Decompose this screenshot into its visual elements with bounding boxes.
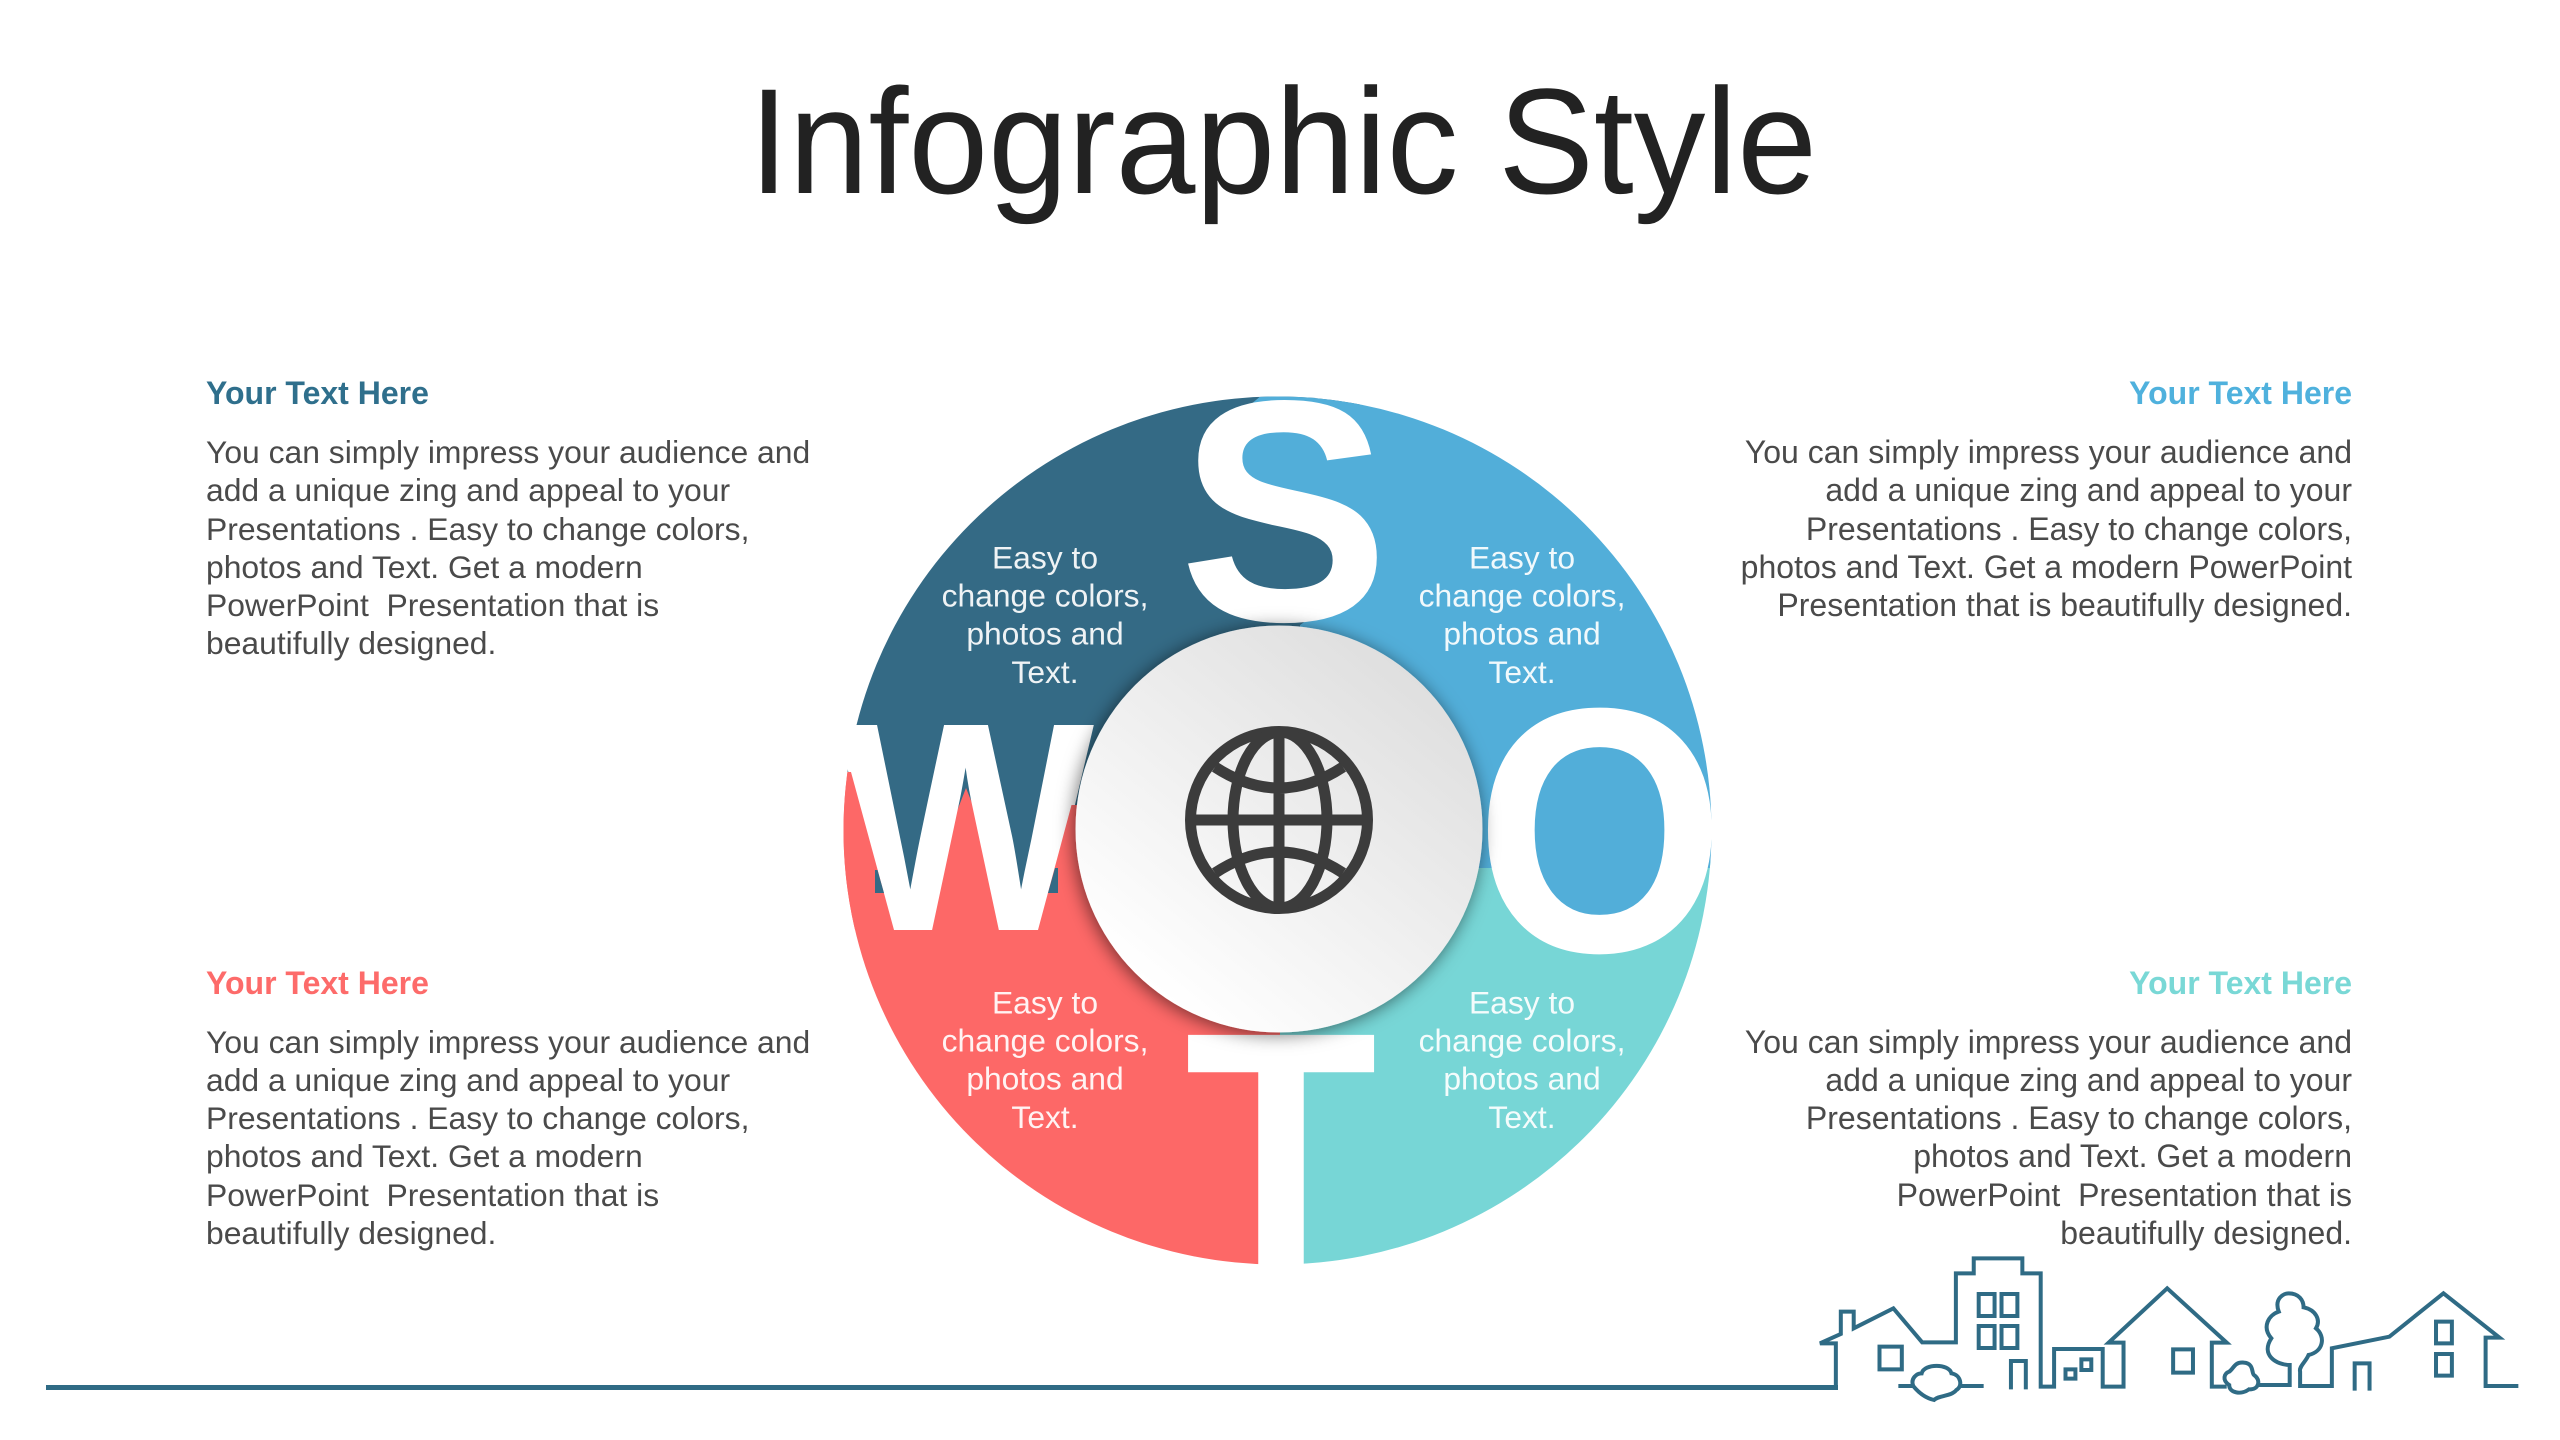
segment: weaknesses / strengths dark <box>830 380 1360 893</box>
letter W: W <box>837 662 1097 994</box>
caption: top right: photos and <box>1443 616 1601 652</box>
caption: top left: Easy to <box>992 540 1098 576</box>
title: Infographic Style <box>749 57 1817 225</box>
text block: bottom right: Your Text Here <box>2129 964 2352 1000</box>
segment edges around letter W <box>844 772 1075 930</box>
segment: opportunities lower (teal) <box>1280 860 1730 1280</box>
caption: top left: photos and <box>966 616 1124 652</box>
caption: bottom right: Easy to <box>1469 984 1575 1020</box>
caption: bottom right: Text. <box>1488 1099 1556 1135</box>
icon: city skyline <box>1820 1258 2518 1400</box>
segment captions <box>942 540 1625 1135</box>
text block: bottom left: Your Text Here <box>206 964 429 1000</box>
caption: top right: Text. <box>1488 654 1556 690</box>
caption: bottom right: photos and <box>1443 1060 1601 1096</box>
caption: bottom left: Text. <box>1011 1099 1079 1135</box>
segment: blue <box>1242 396 1712 915</box>
icon: globe <box>1190 732 1368 908</box>
caption: top right: change colors, <box>1419 578 1625 614</box>
text block: top left: Your Text Here <box>206 375 429 411</box>
caption: top right: Easy to <box>1469 540 1575 576</box>
text block: top right: You can simply impress your audience and add a unique zing and appeal to your Presentations . Easy to change colors, photos and Text. Get a modern PowerPoint Presentation that is beautifully designed. <box>1741 434 2352 623</box>
caption: bottom right: change colors, <box>1419 1022 1625 1058</box>
letter S: S <box>1179 335 1389 687</box>
wheel segments <box>830 380 1730 1282</box>
letter T: T <box>1185 963 1377 1338</box>
ground line <box>46 1385 1838 1390</box>
SWOT wheel <box>844 396 1712 1264</box>
caption: bottom left: Easy to <box>992 984 1098 1020</box>
caption: top left: Text. <box>1011 654 1079 690</box>
caption: bottom left: photos and <box>966 1060 1124 1096</box>
caption: bottom left: change colors, <box>942 1022 1148 1058</box>
text block: top left: You can simply impress your audience and add a unique zing and appeal to your Presentations . Easy to change colors, photos and Text. Get a modern PowerPoint Presentation that is beautifully designed. <box>206 434 810 661</box>
caption: top left: change colors, <box>942 578 1148 614</box>
segment: threats (red) <box>830 772 1280 1282</box>
letter O: O <box>1475 636 1725 1026</box>
text block: bottom left: You can simply impress your audience and add a unique zing and appeal to your Presentations . Easy to change colors, photos and Text. Get a modern PowerPoint Presentation that is beautifully designed. <box>206 1024 810 1251</box>
text block: bottom right: You can simply impress your audience and add a unique zing and appeal to your Presentations . Easy to change colors, photos and Text. Get a modern PowerPoint Presentation that is beautifully designed. <box>1745 1024 2352 1251</box>
center disc <box>1076 626 1482 1032</box>
text block: top right: Your Text Here <box>2129 375 2352 411</box>
